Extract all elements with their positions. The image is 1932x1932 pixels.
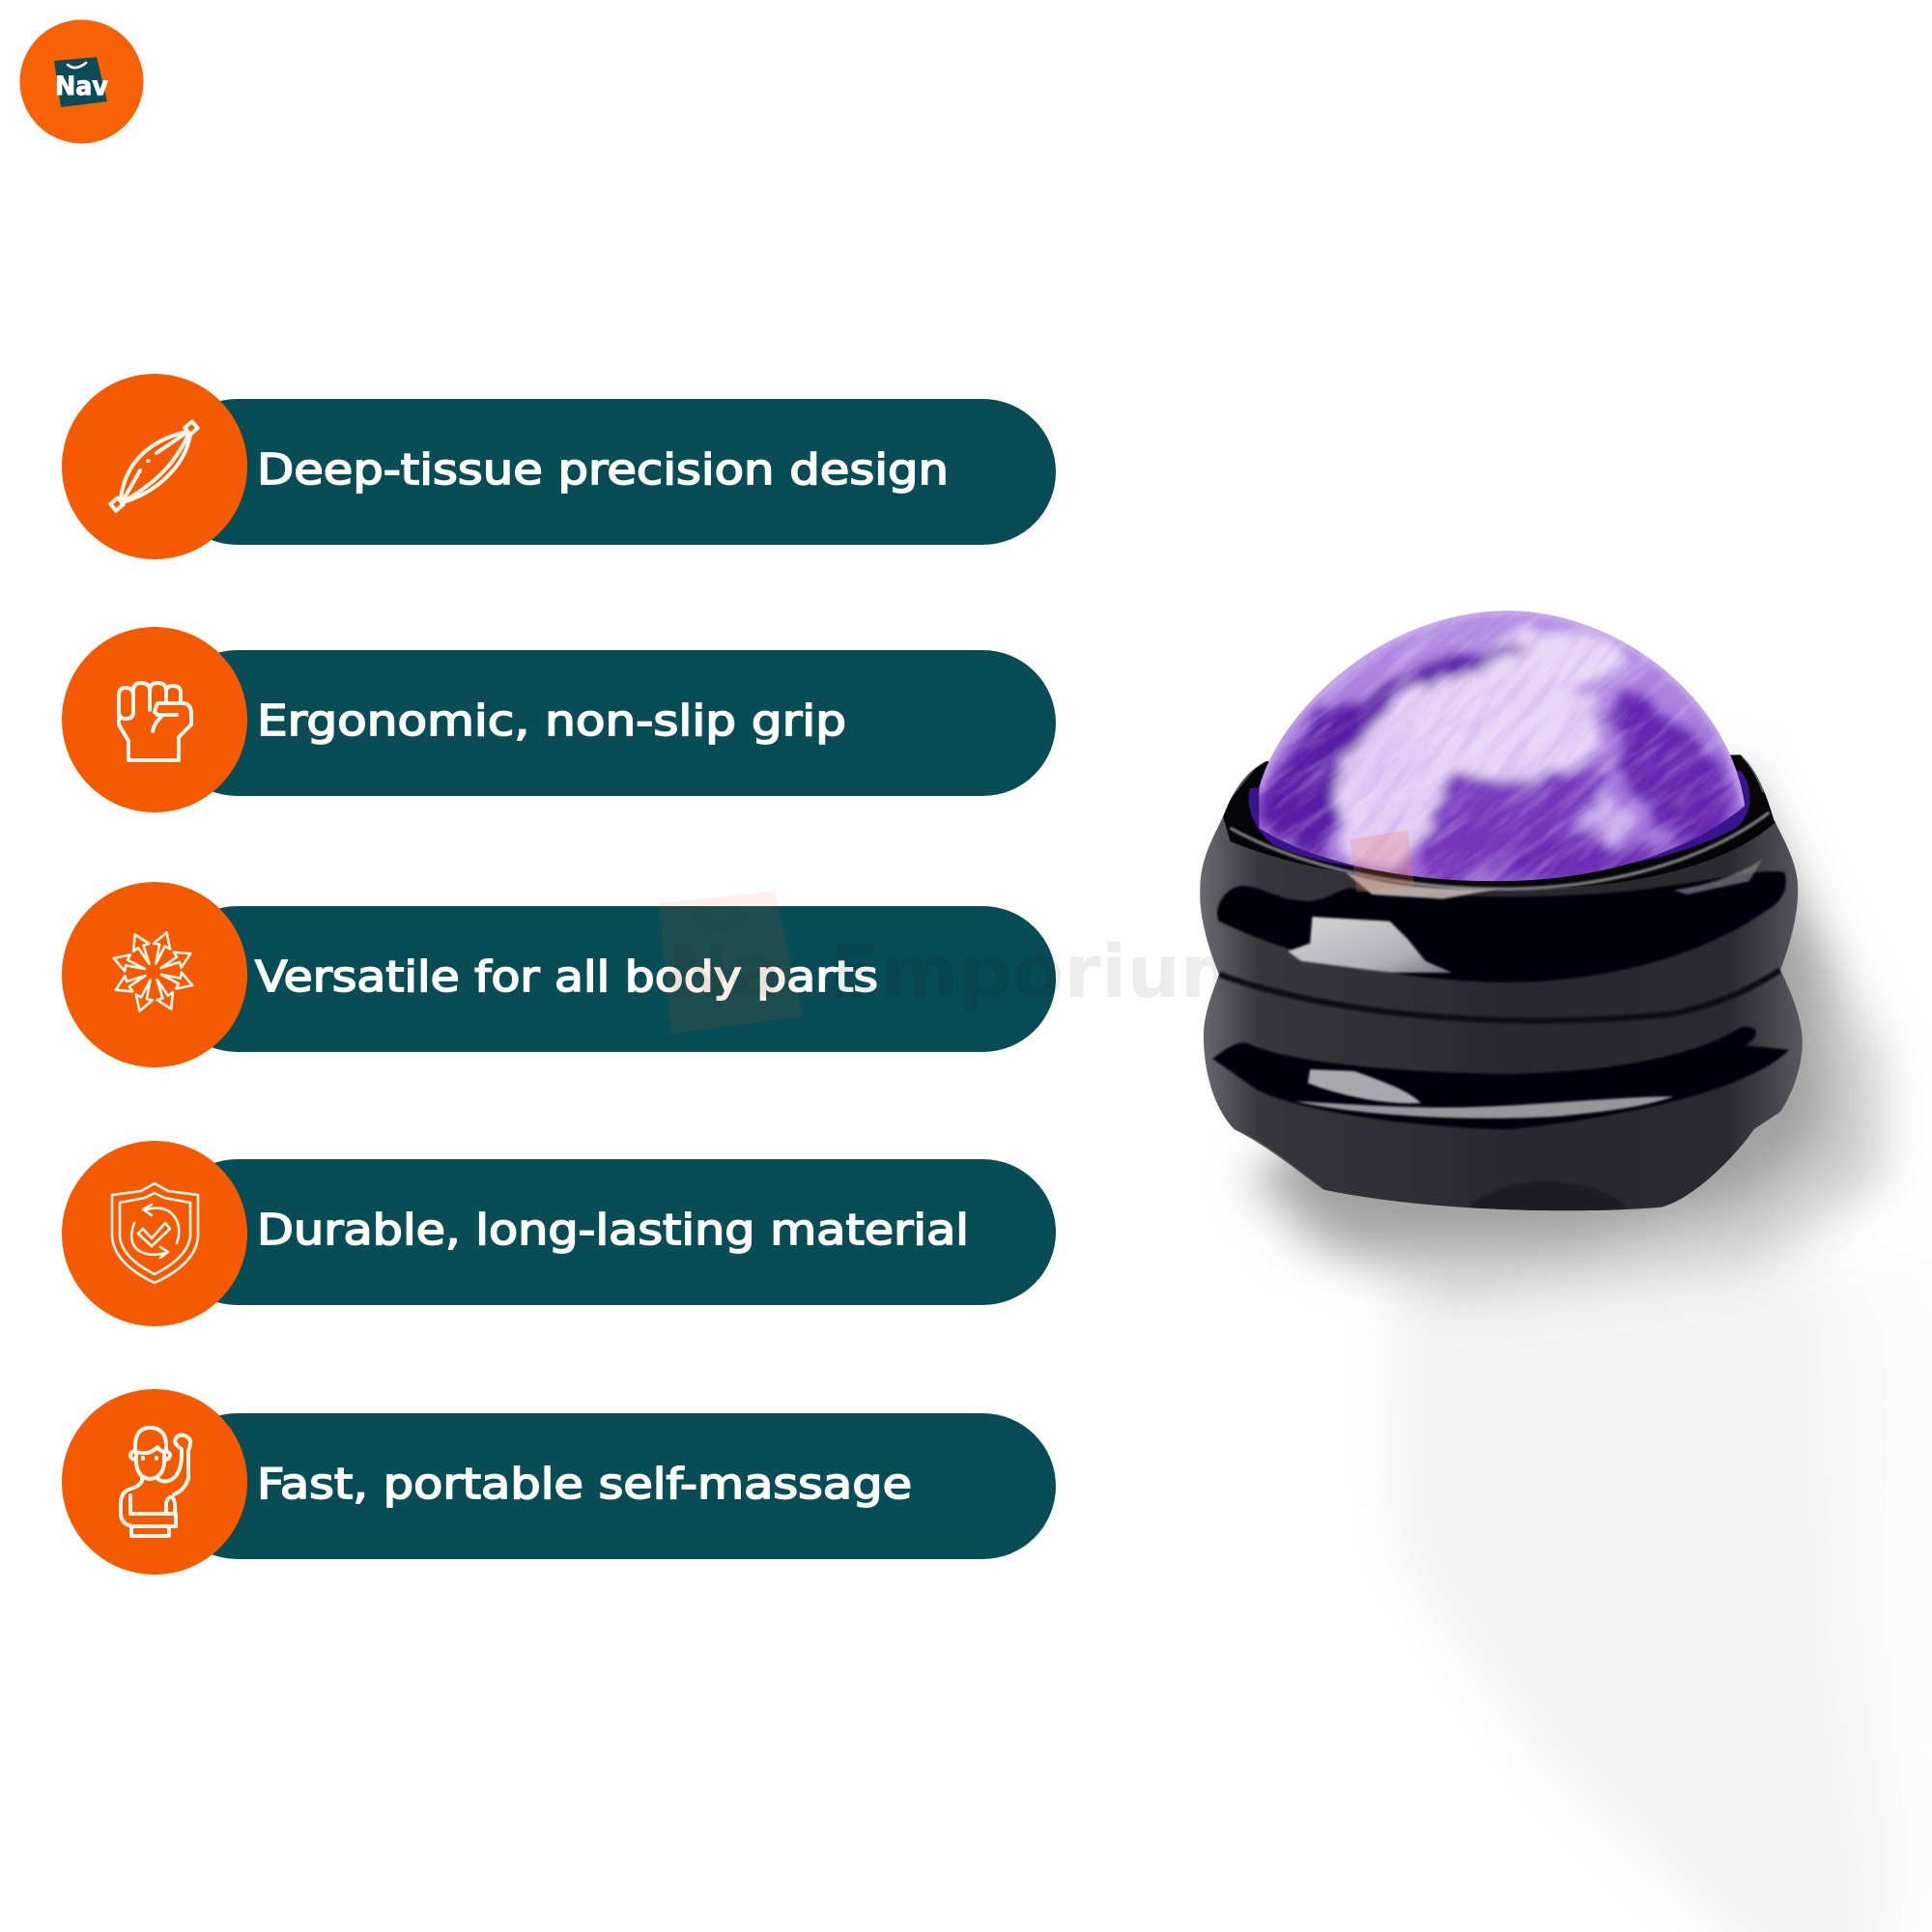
label: deep-tissue: Deep-tissue precision design (257, 445, 949, 495)
bar: ergonomic (164, 650, 1056, 796)
feature row 2 (62, 627, 1056, 812)
icon: fist (119, 683, 191, 760)
orange circle 3 (62, 882, 247, 1067)
product: massage roller ball (1200, 611, 1803, 1211)
watermark: Nav Emporium: Na (667, 928, 781, 1014)
feature row 5 (62, 1389, 1056, 1575)
bar: self-massage (164, 1413, 1056, 1559)
icon: muscle (110, 421, 198, 511)
label: ergonomic: Ergonomic, non-slip grip (257, 696, 846, 746)
orange circle 1 (62, 374, 247, 559)
label: versatile: Versatile for all body parts (255, 952, 878, 1002)
bar: deep-tissue (164, 399, 1056, 545)
label: durable: Durable, long-lasting material (257, 1206, 969, 1255)
feature row 3 (62, 882, 1056, 1067)
watermark: Nav Emporium (659, 892, 1259, 1034)
icon: radiating arrows (111, 929, 195, 1014)
orange circle 2 (62, 627, 247, 812)
small watermark on ball (1350, 830, 1414, 893)
watermark: Nav Emporium: Emporium (829, 928, 1259, 1014)
bar: versatile (164, 906, 1056, 1052)
feature row 1 (62, 374, 1056, 559)
label: self-massage: Fast, portable self-massage (257, 1460, 912, 1509)
icon: shield (112, 1183, 198, 1283)
diagonal soft background shadow (1391, 1256, 1932, 1932)
feature row 4 (62, 1141, 1056, 1326)
orange circle 4 (62, 1141, 247, 1326)
marble ball dome (1259, 611, 1745, 881)
product shadow (1246, 763, 1884, 1299)
rim opening (1249, 770, 1749, 877)
brand logo: Nav (55, 71, 108, 101)
orange circle 5 (62, 1389, 247, 1575)
roller housing (1200, 753, 1803, 1214)
brand logo (19, 19, 143, 143)
icon: person self-massage (121, 1428, 190, 1536)
bar: durable (164, 1159, 1056, 1305)
